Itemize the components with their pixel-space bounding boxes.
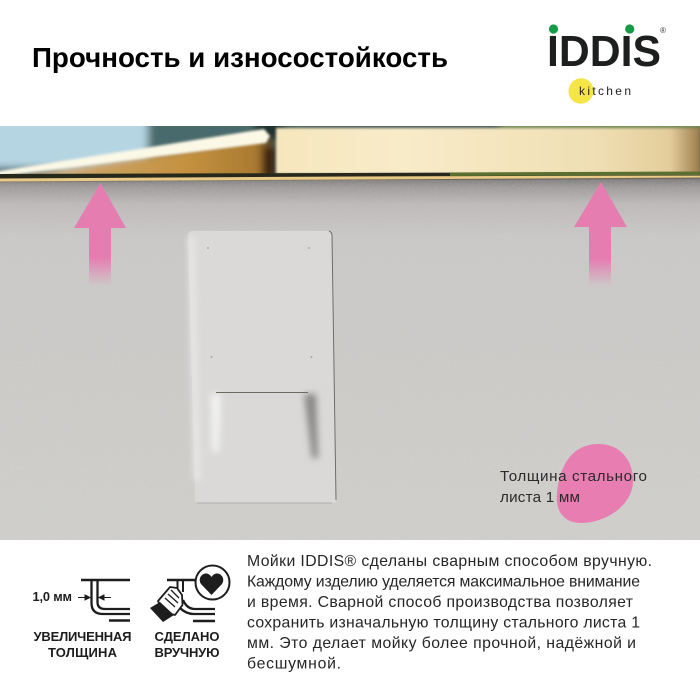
logo yellow blob <box>565 75 597 107</box>
sink profile <box>81 580 130 620</box>
photo: sink edge and wall <box>0 116 700 540</box>
icon: handmade <box>150 566 230 622</box>
icon caption: increased thickness: УВЕЛИЧЕННАЯ <box>34 629 132 644</box>
logo registered mark: ® <box>660 26 666 35</box>
pink arrow right <box>574 182 627 286</box>
body text: бесшумной. <box>247 655 341 672</box>
dimension arrows <box>78 595 111 600</box>
textured wall <box>0 178 700 540</box>
hand <box>150 587 182 622</box>
sink profile <box>167 580 215 621</box>
body text: сохранить изначальную толщину стального листа 1 <box>247 614 640 631</box>
icon caption: handmade: ВРУЧНУЮ <box>154 645 220 660</box>
callout: sheet thickness: листа 1 мм <box>500 489 580 506</box>
logo dots <box>549 24 634 34</box>
dimension label: 1,0 мм <box>32 589 72 604</box>
title: Прочность и износостойкость <box>32 42 448 73</box>
heart badge <box>196 566 230 600</box>
blurred sink interior <box>0 126 700 180</box>
body text: и время. Сварной способ производства позволяет <box>247 594 633 611</box>
body text: мм. Это делает мойку более прочной, надёжной и <box>247 635 636 652</box>
body text: Мойки IDDIS® сделаны сварным способом вручную. <box>247 553 652 570</box>
steel sheet edge <box>0 172 700 183</box>
callout: sheet thickness: Толщина стального <box>500 468 647 485</box>
logo wordmark: IDDIS <box>547 27 661 76</box>
embossed plate <box>188 231 336 503</box>
logo: IDDIS kitchen <box>547 24 666 107</box>
body text: Каждому изделию уделяется максимальное внимание <box>247 573 640 590</box>
plate pin holes <box>207 247 312 358</box>
logo kitchen word: kitchen <box>579 84 631 98</box>
pink arrow left <box>74 183 126 286</box>
pink blob <box>557 444 633 523</box>
tab slot and relief <box>211 392 318 458</box>
icon caption: increased thickness: ТОЛЩИНА <box>48 645 118 660</box>
icon: increased thickness <box>32 580 130 620</box>
icon caption: handmade: СДЕЛАНО <box>154 629 220 644</box>
